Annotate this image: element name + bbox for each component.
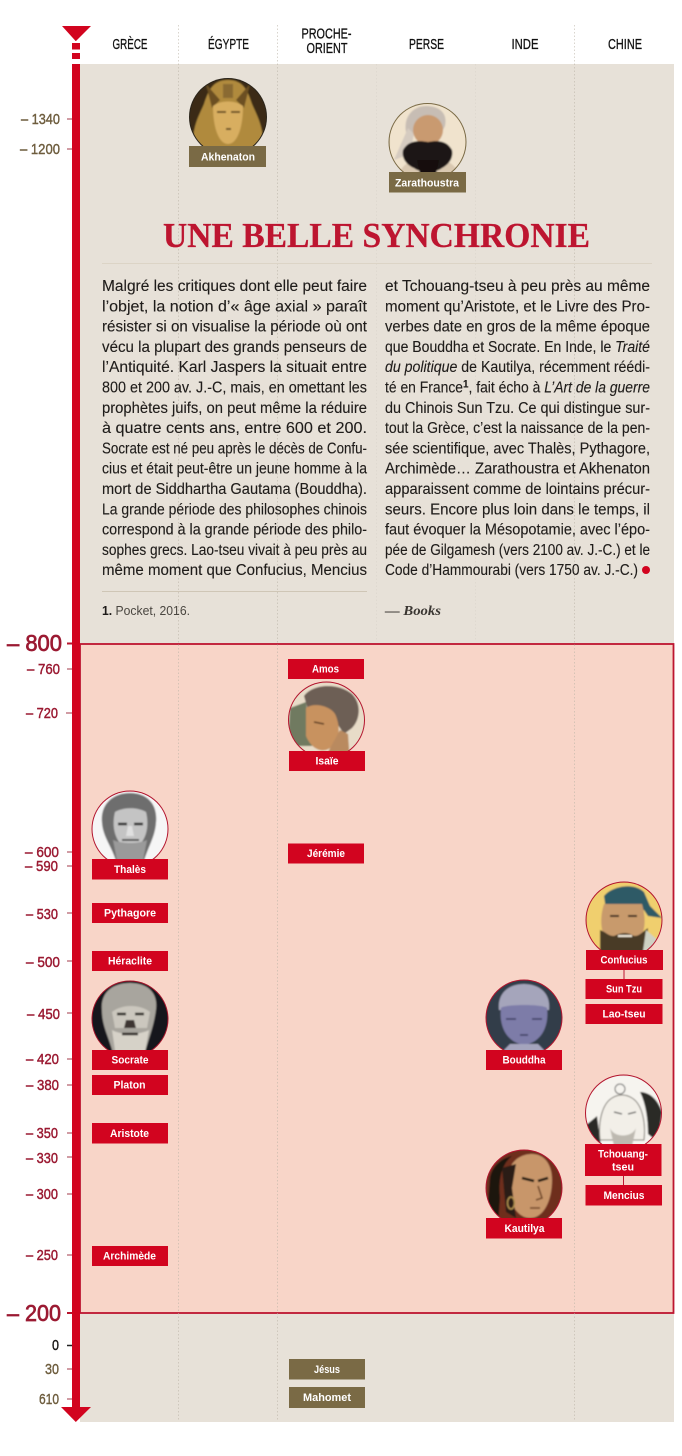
text block: left column — [102, 278, 368, 579]
dates after the axial age: 0 — [52, 1337, 59, 1354]
label: Mahomet — [289, 1387, 365, 1408]
label: Tchouang-tseu: Tchouang- — [598, 1148, 648, 1160]
dates of the axial age: – 600 — [25, 844, 59, 861]
axis ticks — [66, 119, 72, 1399]
text block: right column: Code d’Hammourabi (vers 1750 av. J.-C.) — [385, 562, 638, 579]
label: Platon — [92, 1075, 168, 1095]
label: Sun Tzu: Sun Tzu — [606, 984, 642, 996]
text block: left column: mort de Siddhartha Gautama (Bouddha). — [102, 481, 367, 498]
dates of the axial age: – 720 — [26, 705, 58, 722]
label: Héraclite — [92, 951, 168, 971]
text block: left column: La grande période des philosophes chinois — [102, 501, 367, 518]
header: Grèce: GRÈCE — [112, 36, 148, 53]
dates of the axial age: – 760 — [27, 661, 60, 678]
label: Isaïe — [289, 751, 365, 771]
text block: left column: sophes grecs. Lao-tseu vivait à peu près au — [102, 542, 367, 559]
label: Jérémie — [288, 844, 364, 864]
label: Pythagore: Pythagore — [104, 908, 156, 920]
dates of the axial age: – 200 — [7, 1300, 61, 1326]
dates before the axial age: – 1200 — [20, 141, 60, 158]
header: Perse: PERSE — [409, 36, 444, 53]
label: Socrate: Socrate — [112, 1054, 148, 1066]
label: Jésus — [289, 1359, 365, 1380]
label: Socrate — [92, 1050, 168, 1070]
label: Jérémie: Jérémie — [307, 848, 345, 860]
dates of the axial age — [7, 630, 62, 1326]
label: Archimède: Archimède — [103, 1250, 156, 1262]
text block: right column: tout la Grèce, c’est la naissance de la pen- — [385, 420, 650, 437]
portrait: Akhenaton — [189, 78, 267, 146]
label: Archimède — [92, 1246, 168, 1266]
header: Chine: CHINE — [608, 36, 642, 53]
dates of the axial age: – 330 — [26, 1150, 58, 1167]
footnote: 1. Pocket, 2016. — [102, 603, 190, 618]
text block: left column: correspond à la grande période des philo- — [102, 522, 367, 539]
label: Lao-tseu — [586, 1004, 662, 1024]
dates of the axial age: – 420 — [26, 1051, 59, 1068]
label: Pythagore — [92, 903, 168, 923]
label: Mencius: Mencius — [604, 1190, 644, 1202]
label: Sun Tzu — [586, 979, 662, 999]
label: Akhenaton — [189, 146, 266, 167]
text block: left column: l’Antiquité. Karl Jaspers la situait entre — [102, 359, 367, 376]
text block: right column: seurs. Encore plus loin dans le temps, il — [385, 501, 650, 518]
label: Bouddha — [486, 1050, 562, 1070]
dates of the axial age: – 590 — [25, 858, 58, 875]
label: Lao-tseu: Lao-tseu — [602, 1008, 646, 1020]
text block: left column: vécu la plupart des grands penseurs de — [102, 339, 367, 356]
label: Kautilya: Kautilya — [504, 1223, 545, 1235]
text block: left column: Socrate est né peu après le décès de Confu- — [102, 440, 367, 457]
header: Proche-Orient — [302, 26, 352, 57]
label: Thalès: Thalès — [114, 864, 146, 876]
portrait: Kautilya — [486, 1150, 562, 1218]
text block: left column: 800 et 200 av. J.-C, mais, en omettant les — [102, 380, 367, 396]
text block: left column: même moment que Confucius, Mencius — [102, 562, 367, 579]
portrait: Thalès — [92, 790, 168, 859]
text block: right column: Archimède… Zarathoustra et Akhenaton — [385, 461, 650, 478]
header: Proche-Orient: PROCHE- — [302, 26, 352, 42]
dates after the axial age: 30 — [45, 1361, 59, 1378]
label: Zarathoustra — [389, 172, 466, 192]
label: Confucius: Confucius — [600, 954, 648, 966]
text block: right column: , fait écho à — [468, 380, 544, 396]
text block: right column: faut évoquer la Mésopotamie, avec l’épo- — [385, 522, 650, 539]
text block: right column: et Tchouang-tseu à peu près au même — [385, 278, 650, 295]
text block: right column: moment qu’Aristote, et le Livre des Pro- — [385, 298, 650, 315]
dates of the axial age: – 350 — [26, 1125, 58, 1142]
portrait: Socrate — [92, 980, 168, 1050]
label: Kautilya — [486, 1218, 562, 1238]
label: Jésus: Jésus — [314, 1364, 340, 1376]
text block: right column — [385, 278, 650, 579]
end mark: red dot — [642, 566, 650, 574]
text block: right column: 1 — [463, 378, 468, 390]
portrait: Isaïe — [288, 682, 365, 751]
header: Inde: INDE — [512, 36, 538, 53]
text block: right column: apparaissent comme de lointains précur- — [385, 481, 650, 498]
dates after the axial age — [39, 1337, 59, 1408]
label: Mahomet: Mahomet — [303, 1392, 351, 1404]
label: Akhenaton: Akhenaton — [201, 152, 255, 164]
title: UNE BELLE SYNCHRONIE — [163, 216, 590, 255]
text block: left column: Malgré les critiques dont elle peut faire — [102, 278, 367, 295]
text block: right column: du politique de Kautilya, récemment réédi- — [385, 359, 650, 376]
header: Égypte: ÉGYPTE — [208, 36, 249, 53]
text block: right column: L’Art de la guerre — [544, 380, 650, 396]
label: Bouddha: Bouddha — [502, 1054, 546, 1066]
dates of the axial age: – 500 — [26, 954, 60, 971]
header: Proche-Orient: ORIENT — [306, 40, 348, 57]
text block: left column: à quatre cents ans, entre 600 et 200. — [102, 420, 367, 437]
dates of the axial age: – 530 — [26, 906, 58, 923]
dates before the axial age — [20, 111, 60, 158]
label: Platon: Platon — [114, 1080, 146, 1092]
credit: Books: — Books — [384, 604, 442, 619]
label: Aristote: Aristote — [110, 1128, 149, 1140]
label: Tchouang-tseu — [585, 1144, 662, 1176]
text block: left column: l’objet, la notion d’« âge axial » paraît — [102, 298, 368, 315]
dates of the axial age: – 250 — [26, 1247, 58, 1264]
rule above the text — [102, 263, 652, 264]
text block: right column: verbes date en gros de la même époque — [385, 319, 650, 336]
portrait: Bouddha — [486, 980, 562, 1050]
dates before the axial age: – 1340 — [21, 111, 60, 128]
dates of the axial age: – 380 — [26, 1077, 59, 1094]
portrait: Tchouang-tseu — [585, 1074, 662, 1144]
label: Confucius — [586, 950, 663, 970]
label: Mencius — [586, 1185, 662, 1206]
label: Zarathoustra: Zarathoustra — [395, 178, 460, 190]
text block: right column: sée scientifique, avec Thalès, Pythagore, — [385, 440, 650, 457]
text block: left column: cius et était peut-être un jeune homme à la — [102, 461, 367, 478]
text block: left column: prophètes juifs, on peut même la réduire — [102, 400, 367, 417]
dates of the axial age: – 800 — [7, 630, 62, 656]
column headers — [112, 26, 642, 57]
label: Aristote — [92, 1123, 168, 1144]
text block: left column: résister si on visualise la période où ont — [102, 319, 368, 336]
label: Amos — [288, 659, 364, 679]
text block: right column: que Bouddha et Socrate. En Inde, le Traité — [385, 339, 650, 356]
label: Thalès — [92, 859, 168, 880]
label: Tchouang-tseu: tseu — [612, 1162, 634, 1174]
dates after the axial age: 610 — [39, 1391, 59, 1408]
dates of the axial age: – 300 — [26, 1186, 58, 1203]
panel: axial age highlighted period — [80, 644, 674, 1313]
label: Isaïe: Isaïe — [316, 756, 338, 768]
text block: right column: du Chinois Sun Tzu. Ce qui distingue sur- — [385, 400, 650, 417]
portrait: Confucius — [586, 882, 662, 950]
label: Amos: Amos — [312, 664, 339, 676]
text block: right column: pée de Gilgamesh (vers 2100 av. J.-C.) et le — [385, 542, 650, 559]
text block: right column: té en France — [385, 380, 472, 396]
axis dates — [7, 111, 62, 1408]
label: Héraclite: Héraclite — [108, 956, 152, 968]
dates of the axial age: – 450 — [27, 1006, 60, 1023]
connector: Tchouang-tseu to Mencius — [623, 1176, 624, 1185]
portrait: Zarathoustra — [388, 103, 466, 172]
timeline axis — [61, 26, 91, 1422]
connector: Confucius to Sun Tzu — [624, 970, 625, 979]
